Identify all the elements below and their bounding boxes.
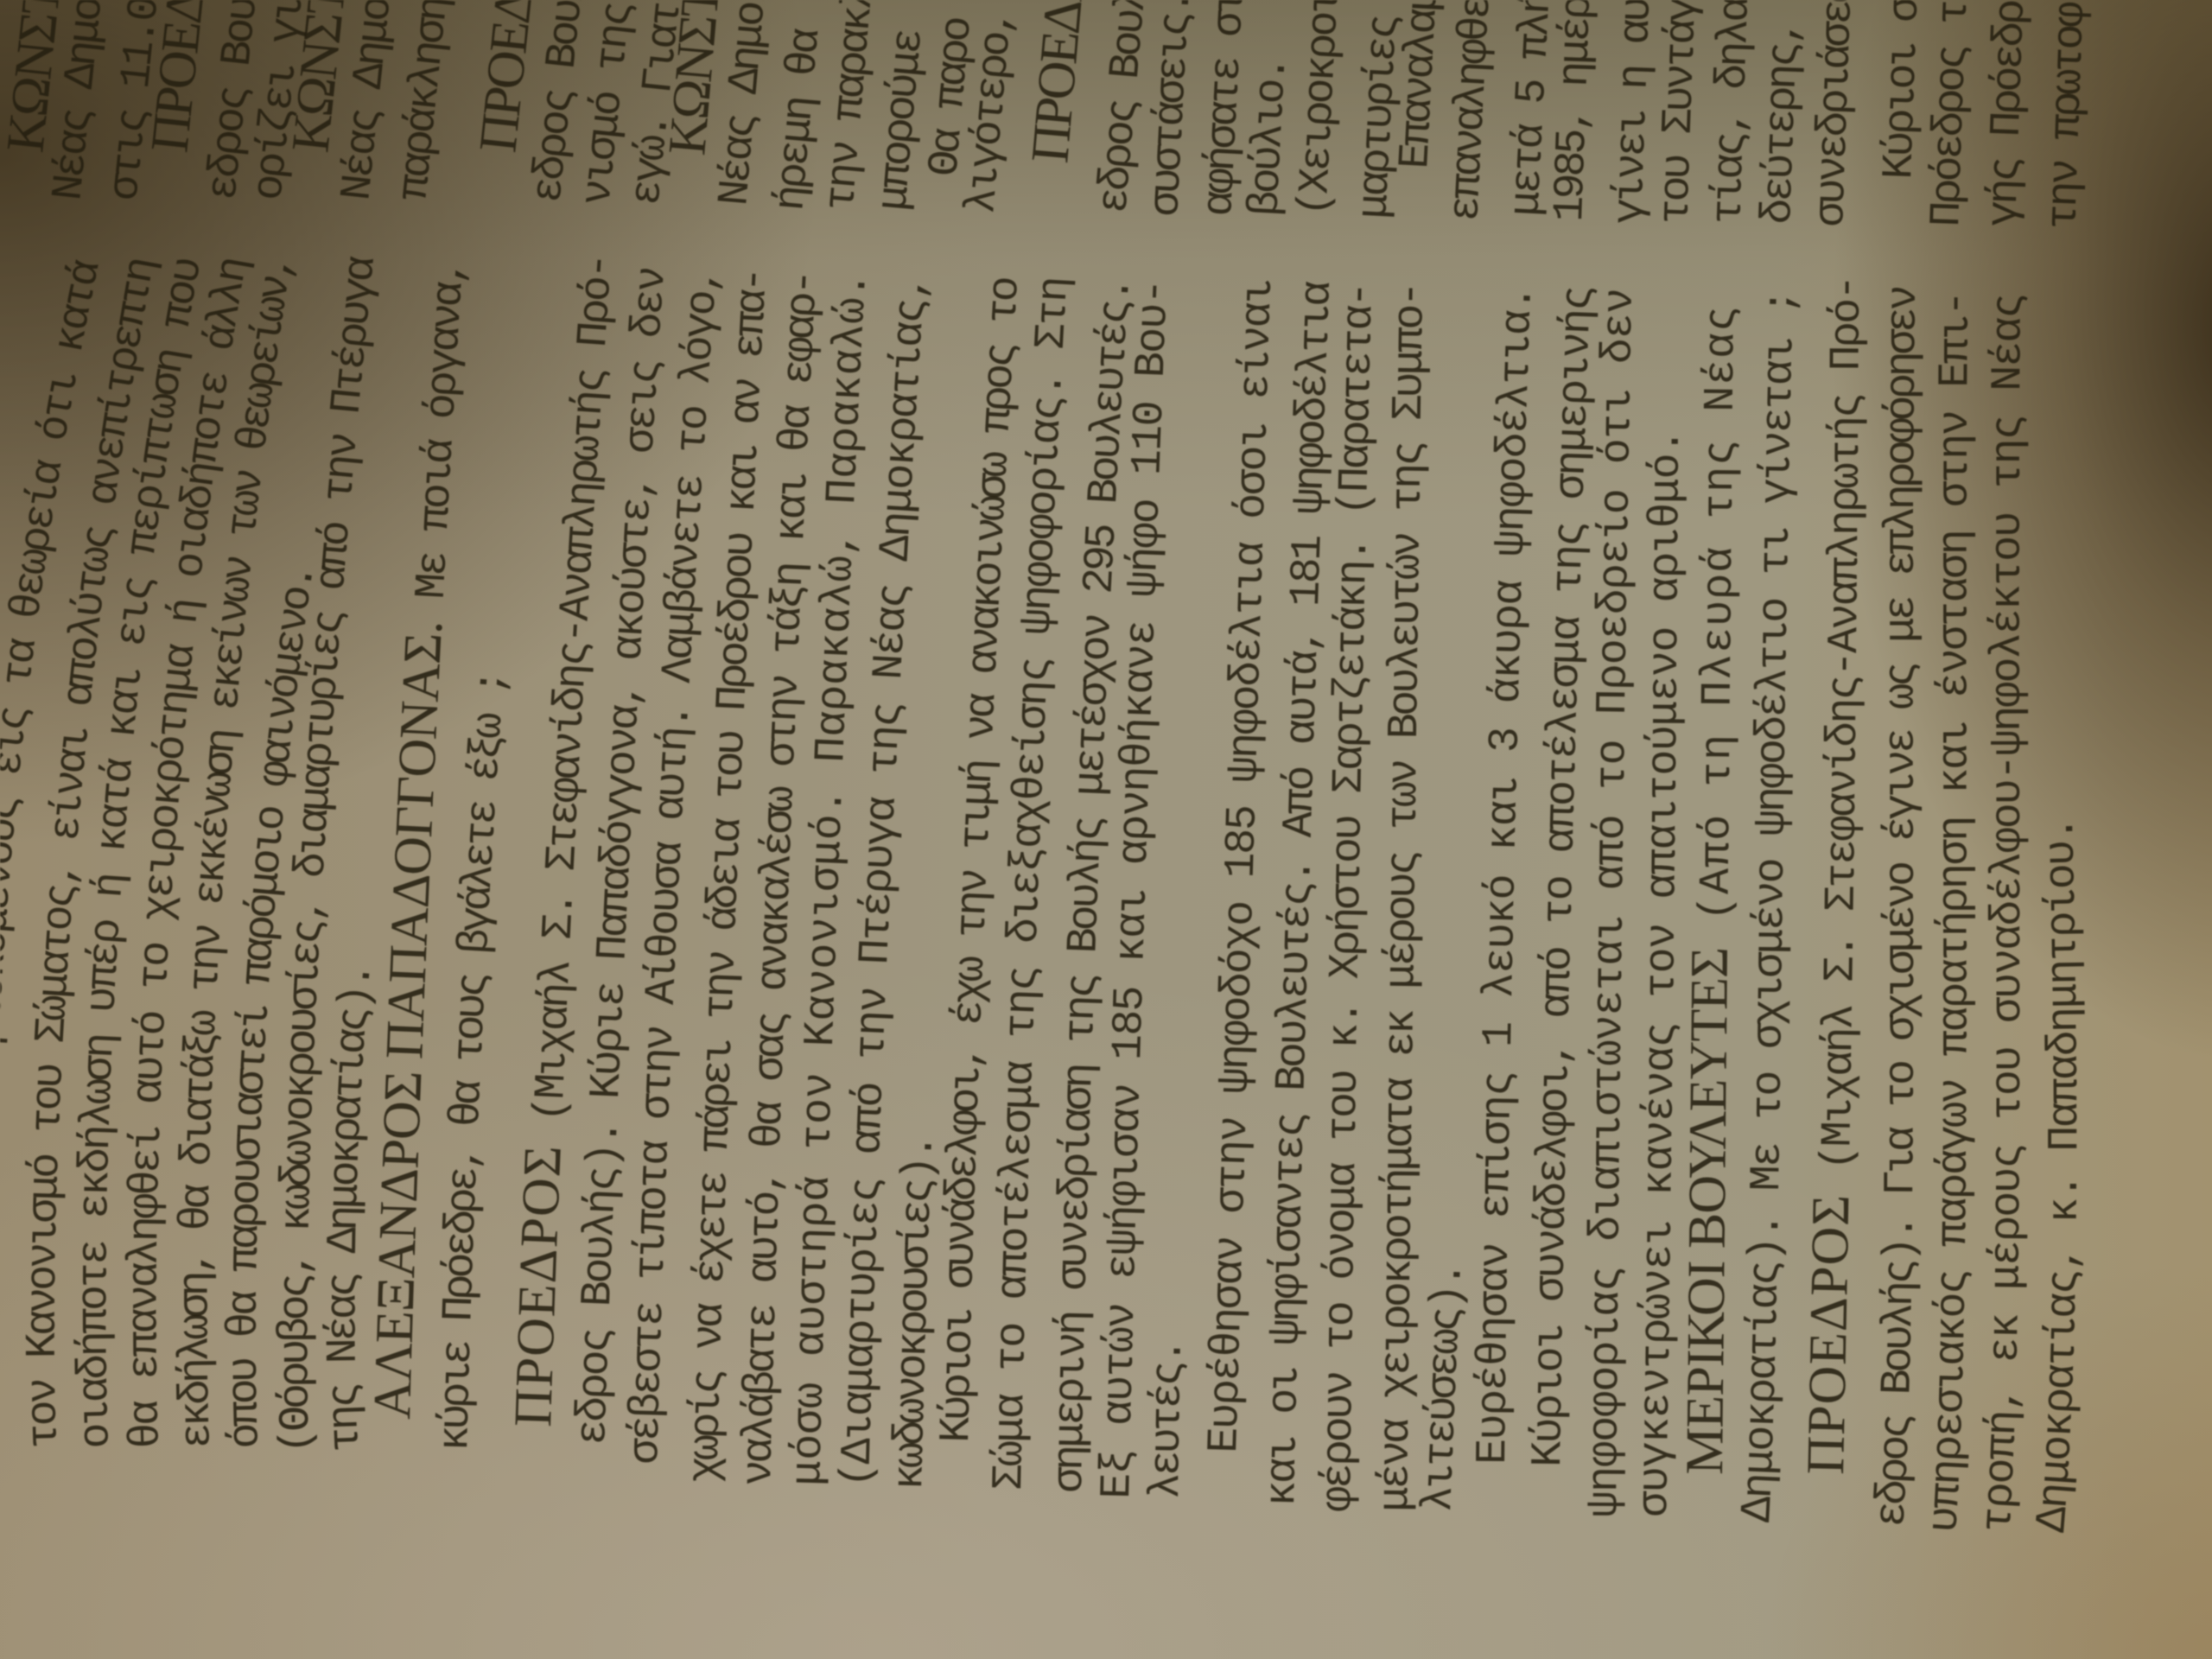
speaker heading and text: the Speaker replies: ναλάβατε αυτό, θα σας ανακαλέσω στην τάξη και θα εφαρ- (734, 271, 830, 1486)
text block: ballots counted: λιτεύσεως). (1414, 1263, 1474, 1513)
text block: warning about the galleries: εκδήλωση, θα διατάξω την εκκένωση εκείνων των θεωρείων, (175, 264, 297, 1446)
speaker heading and text: some members ask about the torn ballot: Δημοκρατίας). Με το σχισμένο ψηφοδέλτιο τι γίνεται ; (1733, 290, 1807, 1523)
text block: protests and bell: κωδωνοκρουσίες). (886, 1136, 945, 1491)
speaker heading and text: some members ask about the torn ballot (1675, 290, 1807, 1523)
text block: announcement of the vote result: σημερινή συνεδρίαση της Βουλής μετέσχον 295 Βουλευτές. (1046, 278, 1142, 1493)
text block: ballots counted: και οι ψηφίσαντες Βουλευτές. Από αυτά, 181 ψηφοδέλτια (1258, 281, 1343, 1507)
speaker heading and text: the Speaker replies: χωρίς να έχετε πάρει την άδεια του Προέδρου και αν επα- (681, 270, 779, 1483)
top strip: next column of the page, cut by the edge: βούλιο. (1241, 58, 1299, 218)
speaker heading and text: the Speaker replies (504, 254, 879, 1486)
text block: no candidate reached the required number: Κύριοι συνάδελφοι, από το αποτέλεσμα της σημερινής (1524, 286, 1604, 1467)
top strip: next column of the page, cut by the edge: του Συντάγ (1651, 0, 1708, 226)
text block: warning about the galleries: όπου θα παρουσιαστεί παρόμοιο φαινόμενο. (223, 574, 313, 1446)
text block: announcement of the vote result (932, 277, 1194, 1499)
text block: uproar from the benches: της Νέας Δημοκρατίας). (321, 972, 377, 1450)
text block: ballots counted (1200, 279, 1544, 1513)
text block: no candidate reached the required number: συγκεντρώνει κανένας τον απαιτούμενο αριθμό. (1630, 429, 1692, 1517)
text block: warning about the galleries (0, 254, 327, 1450)
speaker heading and text: some members ask about the torn ballot: ΜΕΡΙΚΟΙ ΒΟΥΛΕΥΤΕΣ (Από τη Πλευρά της Νέας (1675, 305, 1747, 1475)
top strip: next column of the page, cut by the edge: μπορούμε (869, 29, 934, 213)
speaker heading and text: the Speaker replies: σέβεστε τίποτα στην Αίθουσα αυτή. Λαμβάνετε το λόγο, (621, 268, 730, 1465)
top strip: next column of the page, cut by the edge: νισμό της (573, 2, 643, 208)
top strip: next column of the page, cut by the edge: επαναληφθε (1441, 0, 1503, 223)
text block: ballots counted: Ευρέθησαν επίσης 1 λευκό και 3 άκυρα ψηφοδέλτια. (1469, 285, 1544, 1465)
text block: ballots counted: φέρουν το όνομα του κ. Χρήστου Σαρτζετάκη. (Παρατετα- (1314, 283, 1385, 1512)
speaker heading and text: the Speaker replies: εδρος Βουλής). Κύριε Παπαδόγγονα, ακούστε, σεις δεν (569, 267, 677, 1446)
text block: warning about the galleries: οιαδήποτε εκδήλωση υπέρ ή κατά και εις περίπτωση που (73, 259, 199, 1446)
top strip: next column of the page, cut by the edge: γίνει η αυ (1605, 0, 1662, 226)
text block: announcement of the vote result: Σώμα το αποτέλεσμα της διεξαχθείσης ψηφοφορίας. Στη (985, 277, 1080, 1491)
top strip: next column of the page, cut by the edge: Πρόεδρος τ (1923, 2, 1980, 228)
text block: protests and bell: (Διαμαρτυρίες από την Πτέρυγα της Νέας Δημοκρατίας, (833, 275, 938, 1488)
top strip: next column of the page, cut by the edge: ήρεμη θα (766, 27, 831, 213)
speaker heading and text: the Speaker replies: μόσω αυστηρά τον Κανονισμό. Παρακαλώ, Παρακαλώ. (784, 270, 879, 1486)
speaker heading and text: the Speaker on the torn ballot: τροπή, εκ μέρους του συναδέλφου-ψηφολέκτου της Νέας (1974, 294, 2034, 1534)
text block: ballots counted: μένα χειροκροτήματα εκ μέρους των Βουλευτών της Συμπο- (1371, 284, 1436, 1512)
speaker heading and text: the Speaker on the torn ballot (1796, 276, 2090, 1535)
text block: no candidate reached the required number: ψηφοφορίας διαπιστώνεται από το Προεδρείο ότι δεν (1580, 289, 1645, 1517)
speaker heading and text: Papadogonas: κύριε Πρόεδρε, θα τους βγάλετε έξω ; (431, 672, 518, 1452)
speaker heading and text: the Speaker on the torn ballot: υπηρεσιακός παράγων παρατήρηση και ένσταση στην Επι- (1920, 292, 1981, 1534)
top strip: next column of the page, cut by the edge: 1985, ημέρ (1546, 0, 1603, 223)
top strip: next column of the page, cut by the edge: την πρωτοφ (2039, 2, 2096, 231)
top strip: next column of the page, cut by the edge: Θα παρο (920, 16, 983, 178)
text block: ballots counted: Ευρέθησαν στην ψηφοδόχο 185 ψηφοδέλτια όσοι είναι (1200, 279, 1284, 1453)
text block: announcement of the vote result: λευτές. (1142, 1341, 1194, 1499)
text block: uproar from the benches: (Θόρυβος, κωδωνοκρουσίες, διαμαρτυρίες από την Πτέρυγα (275, 256, 379, 1447)
text block: announcement of the vote result: Εξ αυτών εψήφισαν 185 και αρνηθήκανε ψήφο 110 Βου- (1093, 279, 1180, 1499)
text block: warning about the galleries: τον Κανονισμό του Σώματος, είναι απολύτως ανεπίτρεπτη (24, 259, 162, 1446)
speaker heading and text: the Speaker on the torn ballot: ΠΡΟΕΔΡΟΣ (Μιχαήλ Σ. Στεφανίδης-Αναπληρωτής Πρό- (1796, 276, 1872, 1475)
speaker heading and text: the Speaker replies: ΠΡΟΕΔΡΟΣ (Μιχαήλ Σ. Στεφανίδης-Αναπληρωτής Πρό- (504, 254, 625, 1427)
top strip: next column of the page, cut by the edge (0, 0, 2096, 231)
text block: no candidate reached the required number (1524, 286, 1692, 1517)
speaker heading and text: the Speaker on the torn ballot: Δημοκρατίας, κ. Παπαδημητρίου. (2028, 817, 2090, 1535)
text block: announcement of the vote result: Κύριοι συνάδελφοι, έχω την τιμή να ανακοινώσω προς το (932, 277, 1031, 1443)
top strip: next column of the page, cut by the edge: γής Πρόεδρ (1980, 0, 2037, 228)
speaker heading and text: the Speaker on the torn ballot: εδρος Βουλής). Για το σχισμένο έγινε ως με επληροφόρησεν (1867, 287, 1929, 1529)
speaker heading and text: Papadogonas: ΑΛΕΞΑΝΔΡΟΣ ΠΑΠΑΔΟΓΓΟΝΑΣ. Με ποιά όργανα, (373, 270, 470, 1421)
text block: warning about the galleries: θα επαναληφθεί αυτό το χειροκρότημα ή οιαδήποτε άλλη (124, 259, 255, 1446)
